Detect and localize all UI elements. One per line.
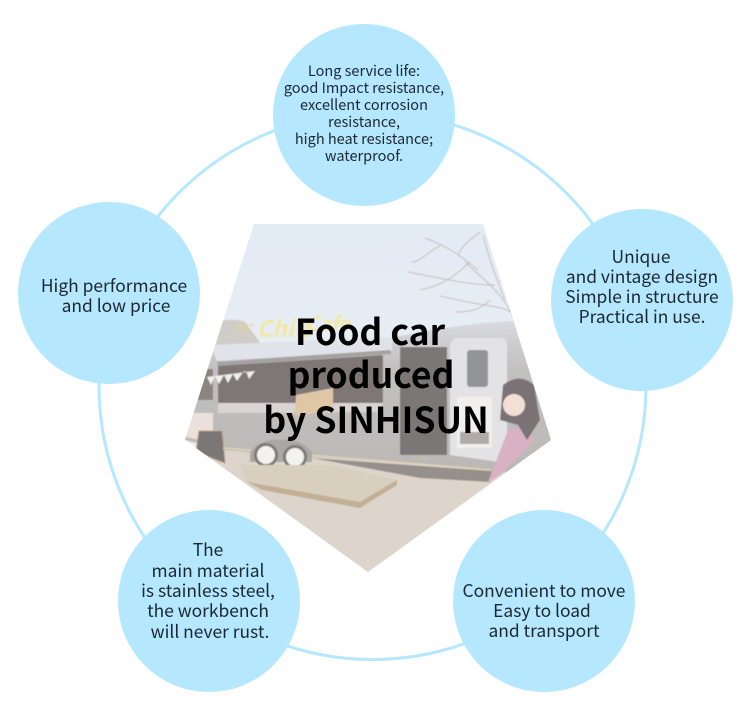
chalkboard sign — [196, 431, 225, 463]
roof band — [210, 337, 392, 361]
white wash — [180, 220, 560, 580]
open door dark — [400, 347, 447, 455]
menu board on truck — [457, 397, 492, 448]
central photo: food truck in pentagon — [180, 220, 560, 580]
circle: convenient to move — [453, 510, 635, 692]
circle: long service life: good Impact resistance, — [284, 77, 444, 98]
circle: long service life: Long service life: — [308, 60, 420, 81]
circle: long service life: resistance, — [328, 111, 400, 132]
circle: stainless steel: is stainless steel, — [141, 578, 275, 603]
service window — [218, 355, 383, 403]
circle: vintage design: Practical in use. — [579, 304, 705, 329]
awning — [217, 350, 391, 366]
shelf counter — [218, 403, 383, 413]
wooden pallet platform — [240, 465, 397, 502]
cartoon girl — [488, 378, 540, 482]
circle: vintage design: Unique — [612, 244, 670, 269]
circle: convenient to move: Easy to load — [493, 598, 591, 623]
ground — [185, 450, 551, 580]
central photo: food truck in pentagon: Chill — [257, 310, 311, 344]
circle: vintage design: and vintage design — [566, 264, 718, 289]
wheels — [250, 440, 312, 462]
circle: long service life — [273, 24, 455, 206]
connecting ring — [99, 112, 646, 660]
circle: stainless steel: will never rust. — [151, 619, 269, 644]
circle: stainless steel — [118, 510, 300, 692]
distant trees — [216, 319, 260, 345]
circle: stainless steel: the workbench — [147, 598, 269, 623]
circle: vintage design — [551, 209, 733, 391]
white door — [450, 338, 507, 463]
circle: high performance: High performance — [41, 273, 187, 298]
central photo: food truck in pentagon: Cafe — [306, 308, 352, 337]
circle: vintage design: Simple in structure — [565, 284, 719, 309]
circle: high performance — [18, 202, 200, 384]
circle: stainless steel: main material — [151, 558, 265, 583]
neon sign: 03" — [237, 320, 254, 336]
center title: produced — [288, 348, 454, 399]
trim line — [223, 448, 490, 470]
left window — [197, 369, 213, 400]
truck body — [185, 321, 551, 478]
center title: by SINHISUN — [263, 393, 489, 444]
circle: high performance: and low price — [62, 293, 170, 318]
burger posters — [295, 388, 333, 416]
circle: convenient to move: Convenient to move — [463, 578, 625, 603]
circle: long service life: excellent corrosion — [300, 94, 428, 115]
circle: long service life: high heat resistance; — [295, 128, 433, 149]
bunting — [207, 371, 255, 385]
underside shadow — [312, 458, 492, 482]
left poster — [186, 413, 213, 443]
circle: stainless steel: The — [193, 537, 223, 562]
circle: long service life: waterproof. — [325, 145, 403, 166]
center title — [263, 305, 489, 444]
circle: convenient to move: and transport — [488, 618, 600, 643]
center title: Food car — [295, 305, 446, 356]
tree branches — [408, 230, 515, 322]
